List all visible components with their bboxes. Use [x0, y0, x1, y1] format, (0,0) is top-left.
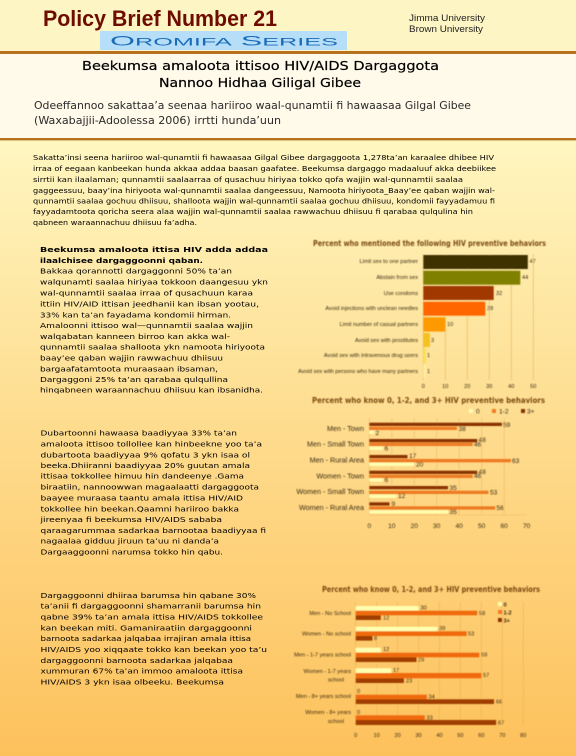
chart: behaviours mentioned: 3 [431, 338, 434, 344]
chart: knowledge by schooling: Men - No School [309, 611, 351, 617]
chart: knowledge by residence: 46 [474, 473, 482, 480]
chart: knowledge by residence: Women - Town [316, 472, 364, 480]
intro paragraph: fayyadamtoota qoricha seera alaa wajjin wal-qunnamtii saalaa rawwachuu dhiisuu fi qarabaa qulqulina hin [33, 207, 473, 216]
chart: behaviours mentioned: 1 [427, 369, 430, 375]
chart: knowledge by schooling: 23 [406, 678, 412, 684]
chart: knowledge by schooling: 0 [354, 733, 357, 739]
intro paragraph: Sakatta’insi seena hariiroo wal-qunamtii fi hawaasaa Gilgal Gibee dargaggoota 1,278ta’an karaalee dhibee HIV [33, 153, 494, 162]
chart: behaviours mentioned: 28 [487, 306, 493, 312]
legend 3: 0 [504, 602, 507, 608]
chart: knowledge by schooling: 67 [498, 720, 504, 726]
text block: preventive behaviours: baay’ee qaban wajjin rawwachuu dhiisuu [40, 353, 223, 362]
chart: knowledge by schooling: Women - 8+ years [305, 710, 351, 716]
intro paragraph [33, 153, 497, 227]
chart: behaviours mentioned: Abstain from sex [376, 275, 418, 281]
chart: knowledge by residence: Women - Rural Area [299, 503, 364, 512]
chart: knowledge by schooling: 34 [428, 694, 435, 700]
chart: knowledge by residence: 6 [384, 446, 388, 452]
text block: town and gender differences: baayee muraasa taantu amala ittisa HIV/AID [40, 493, 243, 502]
chart: knowledge by schooling: 12 [383, 616, 389, 622]
chart: knowledge by schooling: 17 [393, 668, 399, 674]
subheading: Odeeffannoo sakattaa’a seenaa hariiroo waal-qunamtii fi hawaasaa Gilgal Gibee [34, 101, 471, 112]
chart: knowledge by schooling: 60 [478, 733, 485, 739]
chart: behaviours mentioned: Avoid injections with unclean needles [325, 306, 418, 312]
text block: preventive behaviours [40, 245, 268, 395]
chart: knowledge by residence: 35 [450, 485, 457, 492]
text block: education differences: HIV/AIDS yoo xiqqaate tokko kan beekan yoo ta’u [40, 645, 267, 654]
text block: town and gender differences: ittisaa tokkollee himuu hin dandeenye .Gama [40, 472, 244, 481]
chart: knowledge by schooling: 12 [383, 647, 389, 653]
chart: knowledge by schooling: 50 [457, 733, 464, 739]
chart: knowledge by residence: 53 [490, 490, 498, 496]
legend 2: 0 [476, 408, 480, 416]
chart: behaviours mentioned: 40 [508, 384, 514, 390]
chart: knowledge by residence: 40 [456, 523, 463, 530]
chart: knowledge by schooling: 8 [374, 636, 377, 642]
chart: knowledge by residence: 46 [474, 442, 482, 448]
chart: knowledge by schooling: 70 [499, 733, 505, 739]
chart: knowledge by residence: 63 [512, 458, 520, 465]
chart: knowledge by residence: 9 [392, 501, 396, 508]
chart: behaviours mentioned: 50 [530, 384, 536, 390]
banner: Oromifa Series [100, 31, 347, 50]
text block: preventive behaviours: ilaalchisee dargaggoonni qaban. [40, 256, 203, 265]
chart: knowledge by schooling: Men - 1-7 years school [294, 652, 351, 658]
chart: knowledge by residence: 60 [501, 523, 508, 530]
chart: knowledge by residence: 17 [409, 453, 417, 460]
chart: knowledge by schooling: 57 [483, 673, 489, 679]
intro paragraph: sirrtii kan ilaalaman; qunnamtii saalaarraa of qusachuu hiriyaa tokko qofa wajjin wal-qunnamtii saalaa [33, 175, 463, 184]
chart: knowledge by residence [296, 396, 545, 530]
chart title 3: Percent who know 0, 1-2, and 3+ HIV preventive behaviors [322, 585, 540, 594]
chart: knowledge by residence: 10 [388, 523, 396, 530]
chart: behaviours mentioned: Avoid sex with prostitutes [355, 338, 418, 344]
legend 2: 1-2 [499, 408, 509, 416]
chart: behaviours mentioned: Use condoms [384, 291, 418, 297]
chart: knowledge by schooling: 0 [357, 689, 360, 695]
legend 3: 3+ [504, 618, 511, 624]
chart: knowledge by residence: Men - Town [327, 424, 364, 433]
header: universities: Jimma University [409, 13, 485, 24]
text block: preventive behaviours: qunnamtii saalaa shalloota ykn namoota hiriyoota [40, 343, 265, 352]
text block: education differences: ta’anii fi dargaggoonni shamarranii barumsa hin [40, 602, 261, 611]
legend 3: 1-2 [504, 610, 512, 616]
chart: behaviours mentioned: 30 [486, 384, 492, 390]
subheading: (Waxabajjii-Adoolessa 2006) irrtti hunda’uun [34, 116, 281, 127]
header: universities [409, 13, 485, 35]
chart: knowledge by schooling: 20 [394, 733, 401, 739]
main heading: Beekumsa amaloota ittisoo HIV/AIDS Dargaggota [82, 58, 439, 73]
chart: knowledge by residence: Men - Small Town [307, 440, 364, 448]
chart: behaviours mentioned: 32 [496, 291, 502, 297]
chart: knowledge by schooling [294, 585, 540, 739]
chart: knowledge by residence: 6 [384, 477, 388, 484]
chart: knowledge by schooling: Women - 1-7 years [304, 669, 351, 675]
text block: education differences [40, 591, 267, 687]
text block: town and gender differences: jireenyaa fi beekumsa HIV/AIDS sababa [39, 515, 222, 524]
chart: knowledge by residence: 56 [496, 505, 504, 512]
chart: behaviours mentioned: 47 [530, 259, 536, 265]
chart: knowledge by residence: Women - Small Town [296, 487, 364, 496]
legend 2 [469, 408, 535, 416]
text block: preventive behaviours: wal-qunnamtii saalaa irraa of qusachuun karaa [40, 289, 253, 298]
chart: knowledge by schooling: 30 [415, 733, 422, 739]
chart: knowledge by schooling: 39 [439, 626, 445, 632]
legend 2: 3+ [527, 408, 535, 416]
text block: preventive behaviours: Amaloonni ittisoo wal—qunnamtii saalaa wajjin [40, 321, 253, 330]
chart: knowledge by residence: Men - Rural Area [310, 456, 364, 464]
chart: behaviours mentioned: Avoid sex with persons who have many partners [298, 369, 418, 375]
chart: knowledge by residence: 48 [478, 469, 486, 476]
text block: preventive behaviours: Dargaggoni 25% ta’an qarabaa qulqullina [40, 375, 228, 384]
chart: knowledge by residence: 12 [398, 493, 406, 500]
chart: behaviours mentioned: Limit number of casual partners [340, 322, 418, 328]
chart: behaviours mentioned: Avoid sex with intravenous drug users [324, 353, 418, 359]
chart: knowledge by schooling: 59 [481, 652, 487, 658]
chart: knowledge by schooling: 30 [420, 606, 427, 612]
chart: behaviours mentioned: Limit sex to one partner [360, 259, 418, 265]
chart: knowledge by schooling: 33 [426, 716, 433, 722]
text block: preventive behaviours: walqabatan kanneen birroo kan akka wal- [40, 332, 230, 341]
text block: preventive behaviours: walqunamti saalaa hiriyaa tokkoon daangesuu ykn [40, 278, 268, 287]
text block: preventive behaviours: ittiin HIV/AID ittisan jeedhanii kan ibsan yootau, [40, 299, 259, 308]
chart: knowledge by schooling: 0 [357, 710, 360, 716]
text block: education differences: kan beekan miti. Gamaniraatiin dargaggoonni [40, 623, 252, 632]
chart: knowledge by residence: 35 [450, 509, 457, 516]
chart: knowledge by schooling: 40 [436, 733, 443, 739]
text block: town and gender differences: beeka.Dhiiranni baadiyyaa 20% guutan amala [40, 461, 250, 470]
text block: preventive behaviours: hinqabneen waraannachuu dhiisuu kan ibsanidha. [40, 386, 263, 395]
text block: education differences: dargaggoonni barnoota sadarkaa jalqabaa [40, 656, 233, 665]
chart title 2: Percent who know 0, 1-2, and 3+ HIV preventive behaviors [312, 396, 545, 405]
text block: preventive behaviours: 33% kan ta’an fayadama kondomii hirman. [40, 310, 231, 319]
subheading [34, 101, 471, 127]
intro paragraph: qabneen waraannachuu dhiisuu fa’adha. [33, 218, 197, 227]
chart: behaviours mentioned: 10 [447, 322, 453, 328]
header: universities: Brown University [409, 24, 483, 35]
chart: behaviours mentioned: 10 [442, 384, 448, 390]
text block: town and gender differences: qaraagarummaa sadarkaa barnootaa baadiyyaa fi [40, 526, 266, 535]
text block: town and gender differences: nagaalaa gidduu jiruun ta’uu ni danda’a [40, 537, 219, 546]
text block: education differences: HIV/AIDS 3 ykn isaa olbeeku. Beekumsa [40, 678, 224, 687]
chart: knowledge by schooling: Women - No school [302, 632, 351, 638]
chart: knowledge by schooling: 80 [520, 733, 526, 739]
chart: behaviours mentioned [298, 239, 546, 390]
chart: knowledge by residence: 48 [478, 437, 486, 444]
banner: Oromifa Series: O ROMIFA S ERIES [110, 32, 338, 48]
chart: knowledge by residence: 30 [433, 523, 441, 530]
text block: town and gender differences: Dargaaggoonni narumsa tokko hin qabu. [40, 548, 223, 557]
text block: preventive behaviours: bargaafatamtoota muraasaan ibsaman, [40, 364, 218, 373]
chart: behaviours mentioned: 44 [522, 275, 528, 281]
chart: knowledge by schooling: 10 [373, 733, 380, 739]
text block: town and gender differences: amaloota ittisoo tollollee kan hinbeekne yoo ta’a [40, 439, 262, 448]
text block: town and gender differences: dubartoota baadiyyaa 9% qofatu 3 ykn isaa ol [40, 450, 250, 459]
chart: knowledge by residence: 20 [416, 462, 424, 468]
text block: town and gender differences [39, 429, 266, 557]
chart: behaviours mentioned: 20 [464, 384, 470, 390]
chart: knowledge by schooling: 53 [468, 632, 474, 638]
chart: knowledge by residence: 20 [411, 523, 418, 530]
main heading [82, 58, 439, 90]
text block: education differences: barnoota sadarkaa jalqabaa irrajiran amala ittisa [40, 634, 251, 643]
chart: knowledge by residence: 70 [523, 523, 531, 530]
intro paragraph: qunnamtii saalaa gochuu dhiisuu, shalloota wajjin wal-qunnamtii saalaa gochuu dhiisuu, kondomii fayyadamuu fi [33, 196, 495, 206]
text block: town and gender differences: Dubartoonni hawaasa baadiyyaa 33% ta’an [40, 429, 237, 438]
chart: knowledge by residence: 0 [367, 523, 371, 530]
intro paragraph: irraa of eegaan kanbeekan hunda akkaa addaa baasan gaafatee. Beekumsa dargaggo madaaluuf akka deebiikee [33, 164, 497, 173]
chart: behaviours mentioned: 1 [427, 353, 430, 359]
chart: knowledge by schooling: Men - 8+ years school [296, 694, 351, 700]
text block: education differences: Dargaggoonni dhiiraa barumsa hin qabane 30% [40, 591, 256, 600]
header: policy brief title: Policy Brief Number 21 [43, 6, 277, 31]
chart: knowledge by schooling: 58 [479, 611, 485, 617]
chart: knowledge by schooling: 29 [418, 658, 424, 664]
main heading: Nannoo Hidhaa Giligal Gibee [159, 75, 361, 90]
intro paragraph: gaggeessuu, baay’ina hiriyoota wal-qunnamtii saalaa dangeessuu, Namoota hiriyoota_Baay’ee qaban wajjin wal- [33, 186, 495, 195]
text block: town and gender differences: tokkollee hin beekan.Qaamni hariiroo bakka [40, 504, 239, 513]
text block: education differences: xummuran 67% ta’an immoo amaloota ittisa [40, 667, 243, 676]
text block: town and gender differences: biraatiin, nannoowwan magaalaatti dargaggoota [40, 483, 259, 492]
chart: behaviours mentioned: 0 [422, 384, 425, 390]
chart: knowledge by residence: 38 [458, 426, 466, 433]
chart: knowledge by schooling: 66 [496, 700, 502, 706]
chart: knowledge by residence: 59 [503, 422, 511, 429]
text block: education differences: qabne 39% ta’an amala ittisa HIV/AIDS tokkollee [40, 613, 264, 622]
text block: preventive behaviours: Bakkaa qorannotti dargaggonni 50% ta’an [40, 267, 232, 276]
chart: knowledge by schooling: school [328, 678, 344, 684]
chart: knowledge by residence: 2 [376, 430, 380, 437]
text block: preventive behaviours: Beekumsa amaloota ittisa HIV adda addaa [40, 245, 268, 254]
legend 3 [498, 602, 512, 624]
chart: knowledge by schooling: school [328, 719, 344, 725]
chart: knowledge by residence: 50 [478, 523, 486, 530]
